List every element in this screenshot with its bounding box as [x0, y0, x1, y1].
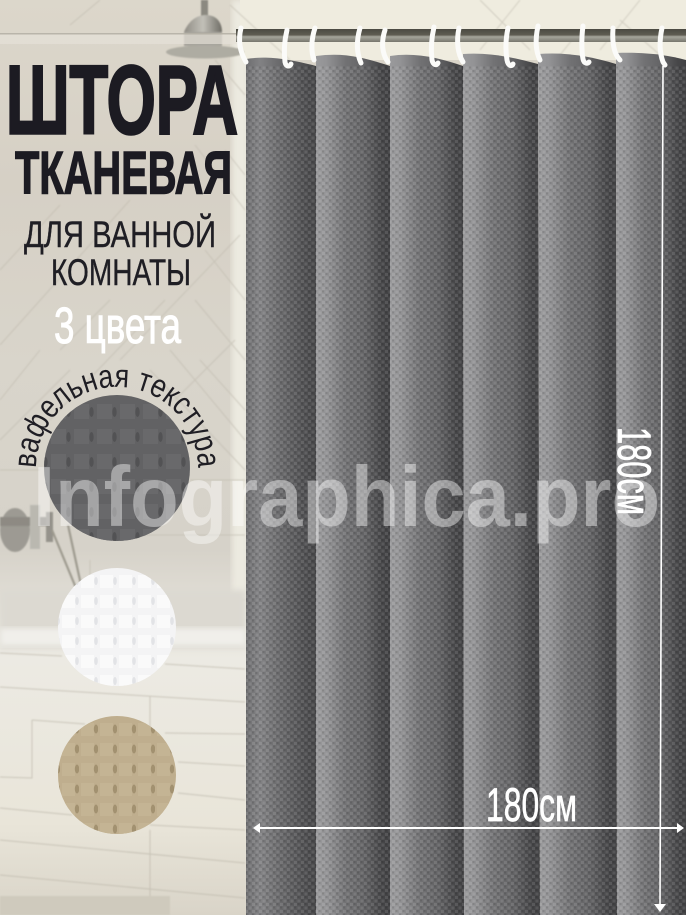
width arrow	[253, 823, 684, 833]
shower head	[166, 0, 244, 58]
height arrow	[654, 66, 666, 912]
bath tub rim	[0, 590, 246, 648]
subtitle line 1: ДЛЯ ВАННОЙ	[24, 213, 216, 255]
fold 2	[316, 55, 390, 915]
curtain	[246, 53, 686, 915]
faucet	[0, 505, 81, 588]
colour count: 3 цвета	[54, 297, 181, 354]
height label: 180см	[608, 427, 661, 515]
title line 2: ТКАНЕВАЯ	[15, 140, 232, 206]
swatch: grey waffle	[44, 395, 190, 541]
waffle weave	[246, 66, 686, 915]
curtain hooks	[240, 26, 665, 66]
title line 1: ШТОРА	[6, 46, 238, 154]
watermark: Infographica.pro	[33, 450, 660, 545]
width label: 180см	[486, 778, 577, 831]
subtitle	[24, 213, 216, 293]
fold 6	[616, 53, 686, 915]
title	[6, 46, 238, 206]
fold 3	[390, 55, 464, 915]
curtain rod	[0, 29, 686, 44]
fold 1	[246, 58, 316, 915]
swatch: white waffle	[58, 568, 176, 686]
arc caption: вафельная текстура	[18, 370, 216, 468]
fold 4	[463, 54, 540, 915]
fold 5	[538, 53, 617, 915]
subtitle line 2: КОМНАТЫ	[51, 252, 191, 293]
swatch: beige waffle	[58, 716, 176, 834]
